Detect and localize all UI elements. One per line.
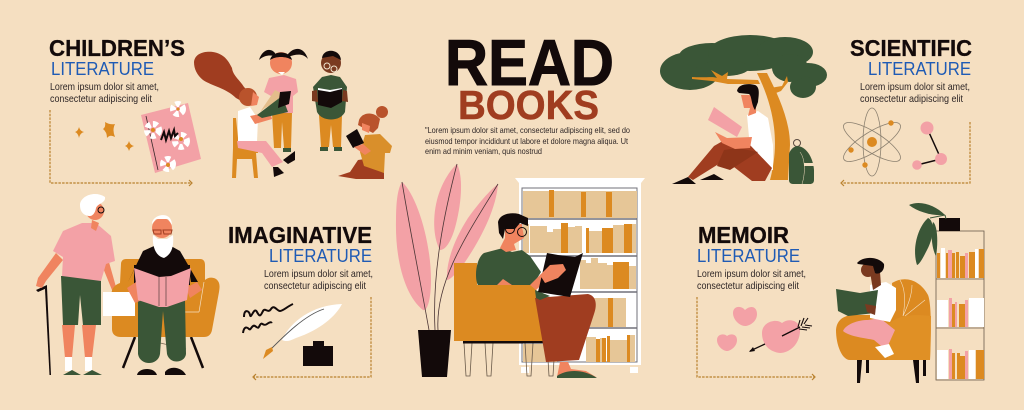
text block: memoir description: Lorem ipsum dolor sit amet, bbox=[697, 269, 806, 280]
text block: intro paragraph: eiusmod tempor incididunt ut labore et dolore magna aliqua. Ut bbox=[425, 136, 629, 146]
icon: atom bbox=[839, 108, 905, 176]
illustration: tree bbox=[660, 35, 827, 180]
arrow: imaginative dashed corner bbox=[253, 297, 371, 380]
illustration: girl on chair with long hair bbox=[194, 52, 295, 178]
panel: children's literature bbox=[49, 35, 392, 186]
icon: feather quill bbox=[263, 304, 342, 359]
illustration: backpack bbox=[789, 140, 814, 184]
heading: children's: CHILDREN’S bbox=[49, 35, 185, 61]
arrow: scientific dashed corner bbox=[841, 122, 970, 186]
illustration: man under tree reading bbox=[672, 84, 773, 184]
panel: scientific literature bbox=[660, 35, 972, 186]
icon: molecule bbox=[912, 122, 947, 170]
illustration: small bookcase bbox=[936, 231, 984, 380]
illustration: old woman with cane bbox=[36, 194, 118, 375]
illustration: white bookcase bbox=[515, 178, 645, 373]
illustration: old man reading bbox=[127, 215, 202, 375]
subheading: scientific literature: LITERATURE bbox=[868, 58, 971, 79]
panel: memoir literature bbox=[697, 203, 984, 383]
heading: memoir: MEMOIR bbox=[698, 222, 789, 248]
text block: children's description: Lorem ipsum dolor sit amet, bbox=[50, 82, 159, 93]
text block: intro paragraph: enim ad minim veniam, quis nostrud bbox=[425, 146, 542, 156]
icon: ink bottle bbox=[303, 341, 333, 366]
heading: scientific: SCIENTIFIC bbox=[850, 35, 972, 61]
title word: books: BOOKS bbox=[458, 82, 599, 128]
illustration: potted plant on shelf bbox=[909, 203, 960, 265]
text block: intro paragraph: "Lorem ipsum dolor sit amet, consectetur adipiscing elit, sed do bbox=[425, 125, 630, 135]
arrow: dashed corner bbox=[50, 110, 192, 186]
subheading: imaginative literature: LITERATURE bbox=[269, 245, 372, 266]
illustration: orange armchair bbox=[111, 259, 220, 368]
text block: scientific description: Lorem ipsum dolor sit amet, bbox=[860, 82, 970, 93]
illustration: standing boy with book bbox=[312, 51, 348, 151]
illustration: girl with pigtails bbox=[257, 49, 308, 152]
arrow: memoir dashed corner bbox=[697, 297, 815, 380]
illustration: man reading bbox=[476, 213, 597, 378]
icon: hearts with arrow bbox=[717, 307, 812, 353]
illustration: sitting girl with book bbox=[338, 106, 392, 179]
icon: sparkles bbox=[75, 122, 134, 151]
text block: children's description: consectetur adipiscing elit bbox=[50, 94, 152, 105]
panel: central reading scene bbox=[396, 164, 645, 378]
heading: imaginative: IMAGINATIVE bbox=[228, 222, 372, 248]
illustration: armchair bbox=[454, 263, 570, 376]
text block: scientific description: consectetur adipiscing elit bbox=[860, 94, 963, 105]
subheading: memoir literature: LITERATURE bbox=[697, 245, 800, 266]
text block: imaginative description: consectetur adipiscing elit bbox=[264, 281, 366, 292]
text block: imaginative description: Lorem ipsum dolor sit amet, bbox=[264, 269, 373, 280]
illustration: woman in armchair bbox=[836, 258, 931, 383]
illustration: paper sheet bbox=[103, 292, 135, 316]
icon: pink book with daisies bbox=[141, 103, 201, 173]
title: read books bbox=[425, 26, 630, 156]
title word: read: READ bbox=[445, 26, 614, 99]
icon: scribble bbox=[243, 304, 293, 333]
panel: imaginative literature bbox=[36, 194, 373, 380]
text block: memoir description: consectetur adipiscing elit bbox=[697, 281, 799, 292]
illustration: pink plant bbox=[396, 164, 498, 377]
subheading: literature: LITERATURE bbox=[51, 58, 154, 79]
